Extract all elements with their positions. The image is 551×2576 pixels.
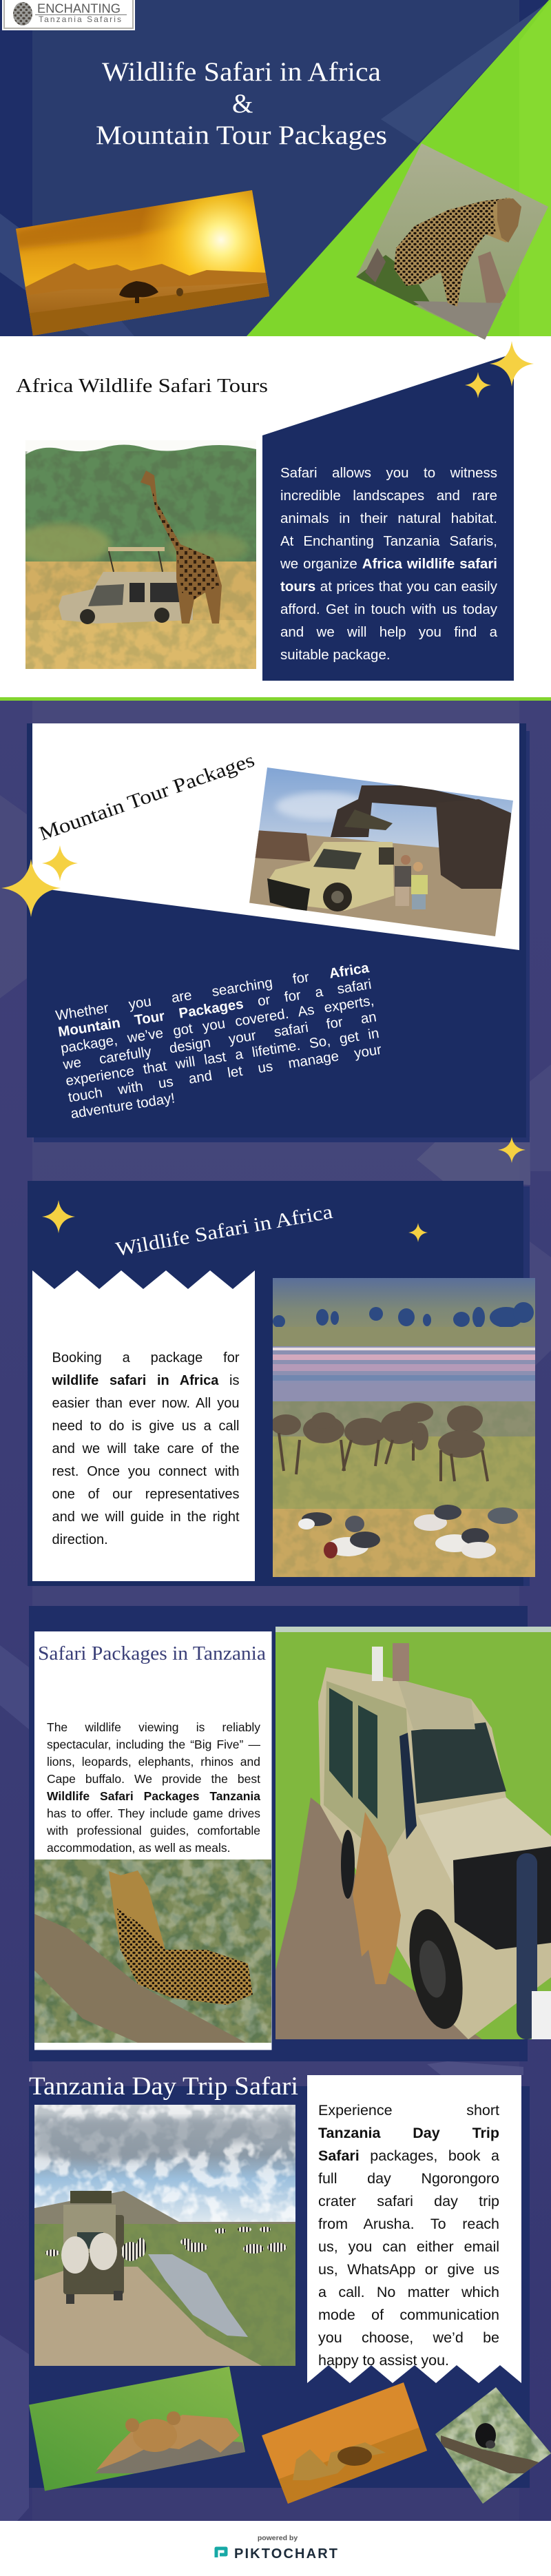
- hero background panel: [0, 0, 551, 336]
- photo: lion cub on a rock: [28, 2363, 248, 2495]
- powered by: powered by: [258, 2534, 298, 2542]
- text block: booking a package: rest. Once you connect with: [52, 1464, 240, 1479]
- heading: Tanzania Day Trip Safari: [29, 2072, 298, 2101]
- photo: leopard on log: [356, 143, 548, 340]
- text block: safari packages: Cape buffalo. We provide the best: [47, 1772, 260, 1786]
- text block: safari intro: tours at prices that you can easily: [280, 579, 497, 595]
- panel: Safari Packages in Tanzania: [29, 1606, 551, 2061]
- text block: mountain tour packages: Whether you are searching for Africa: [54, 960, 370, 1024]
- stars: [42, 1200, 428, 1242]
- text block: day trip safari: us, you can either email: [318, 2238, 499, 2255]
- title: Wildlife Safari in Africa: [102, 57, 381, 87]
- text block: day trip safari: from Arusha. To reach: [318, 2216, 499, 2232]
- text block: safari packages: [47, 1720, 260, 1855]
- text block: safari intro: afford. Get in touch with us today: [280, 601, 497, 617]
- text block: safari packages: Wildlife Safari Packages Tanzania: [47, 1789, 260, 1803]
- text block: booking a package: easier than ever now. All you: [52, 1396, 240, 1411]
- text block: day trip safari: Experience short: [318, 2102, 499, 2119]
- text block: booking a package: Booking a package for: [52, 1350, 240, 1366]
- logo wordmark: ENCHANTING: [37, 1, 121, 15]
- photo: safari vehicle and zebras by a pool: [34, 2105, 295, 2366]
- text block: mountain tour packages: touch with us and let us manage your: [67, 1042, 383, 1106]
- icon: Piktochart logo: [216, 2548, 226, 2557]
- white column: [34, 1631, 271, 2050]
- text block: day trip safari: a call. No matter which: [318, 2284, 499, 2300]
- text block: safari intro: At Enchanting Tanzania Safaris,: [280, 533, 497, 549]
- photo: lions on the plain: [258, 2380, 430, 2508]
- text block: safari intro: [280, 465, 497, 663]
- panel: Tanzania Day Trip Safari: [28, 2072, 551, 2508]
- title: &: [232, 89, 253, 119]
- heading: Africa Wildlife Safari Tours: [16, 375, 268, 397]
- stars: [465, 341, 534, 398]
- photo: colobus monkey in a tree: [434, 2384, 551, 2508]
- white zigzag text panel: [307, 2075, 521, 2383]
- text block: day trip safari: [318, 2102, 499, 2369]
- text block: mountain tour packages: we carefully design your safari for an: [62, 1009, 377, 1073]
- text block: mountain tour packages: Mountain Tour Packages or for a safari: [57, 976, 373, 1040]
- text block: safari intro: and we will help you find a: [280, 624, 497, 640]
- panel: Wildlife Safari in Africa: [28, 1181, 535, 1586]
- text block: booking a package: need to do is give us a call: [52, 1419, 240, 1434]
- text block: day trip safari: Tanzania Day Trip: [318, 2125, 499, 2141]
- panel: Mountain Tour Packages: [1, 723, 530, 1142]
- heading: Wildlife Safari in Africa: [114, 1201, 335, 1261]
- footer: [0, 2521, 551, 2576]
- photo: lion beside a safari vehicle: [276, 1627, 551, 2039]
- photo: savanna sunset: [16, 190, 269, 336]
- text block: mountain tour packages: package, we’ve got you covered. As experts,: [59, 993, 375, 1056]
- green divider bar: [0, 697, 551, 701]
- text block: day trip safari: mode of communication: [318, 2307, 499, 2323]
- text block: day trip safari: you choose, we’d be: [318, 2329, 499, 2346]
- icon: leopard head: [13, 2, 32, 25]
- text block: day trip safari: full day Ngorongoro: [318, 2170, 499, 2187]
- text block: mountain tour packages: adventure today!: [70, 1090, 176, 1122]
- star: [498, 1137, 526, 1163]
- text block: booking a package: wildlife safari in Africa is: [52, 1373, 240, 1388]
- logo: [2, 0, 135, 30]
- text block: day trip safari: us, WhatsApp or give us: [318, 2261, 499, 2278]
- text block: safari packages: spectacular, including the “Big Five” —: [47, 1738, 260, 1751]
- text block: day trip safari: happy to assist you.: [318, 2352, 449, 2369]
- text block: mountain tour packages: [54, 960, 383, 1122]
- text block: booking a package: direction.: [52, 1532, 108, 1547]
- title: Mountain Tour Packages: [96, 121, 387, 150]
- photo: safari vehicle and couple at the rock gate: [248, 765, 517, 940]
- photo: flamingos, wildebeest and cranes: [271, 1278, 535, 1577]
- stars: [1, 845, 78, 917]
- text block: day trip safari: Safari packages, book a: [318, 2147, 499, 2164]
- text block: booking a package: one of our representatives: [52, 1487, 240, 1502]
- text block: safari intro: suitable package.: [280, 647, 391, 663]
- text block: safari intro: incredible landscapes and rare: [280, 488, 497, 504]
- text block: safari packages: with professional guides, comfortable: [47, 1824, 260, 1837]
- text block: safari intro: animals in their natural habitat.: [280, 511, 497, 526]
- text block: safari packages: The wildlife viewing is reliably: [47, 1720, 260, 1734]
- text block: safari intro: Safari allows you to witness: [280, 465, 497, 481]
- logo wordmark: [35, 1, 127, 24]
- text block: booking a package: and we will take care of the: [52, 1441, 240, 1456]
- hero green triangle: [247, 0, 551, 336]
- text block: booking a package: [52, 1350, 240, 1547]
- text block: safari packages: lions, leopards, elephants, rhinos and: [47, 1755, 260, 1769]
- text block: safari packages: has to offer. They include game drives: [47, 1806, 260, 1820]
- section background: purple page: [0, 701, 551, 2521]
- logo wordmark: Tanzania Safaris: [39, 14, 121, 24]
- white diagonal panel: [32, 723, 519, 950]
- section: Africa Wildlife Safari Tours: [14, 341, 534, 681]
- photo: giraffe and safari vehicle: [14, 440, 256, 669]
- text block: day trip safari: crater safari day trip: [318, 2193, 499, 2209]
- text block: booking a package: and we will guide in the right: [52, 1509, 240, 1525]
- text panel background: [262, 353, 514, 681]
- photo: leopard in an acacia tree: [34, 1859, 271, 2043]
- Piktochart wordmark: PIKTOCHART: [234, 2546, 337, 2562]
- white zigzag text panel: [32, 1270, 255, 1581]
- heading: Mountain Tour Packages: [37, 749, 258, 845]
- heading: Safari Packages in Tanzania: [38, 1642, 266, 1665]
- text block: safari packages: accommodation, as well as meals.: [47, 1841, 230, 1855]
- title: [96, 57, 387, 150]
- text block: mountain tour packages: experience that will last a lifetime. So, get in: [65, 1025, 380, 1089]
- text block: safari intro: we organize Africa wildlife safari: [280, 556, 497, 572]
